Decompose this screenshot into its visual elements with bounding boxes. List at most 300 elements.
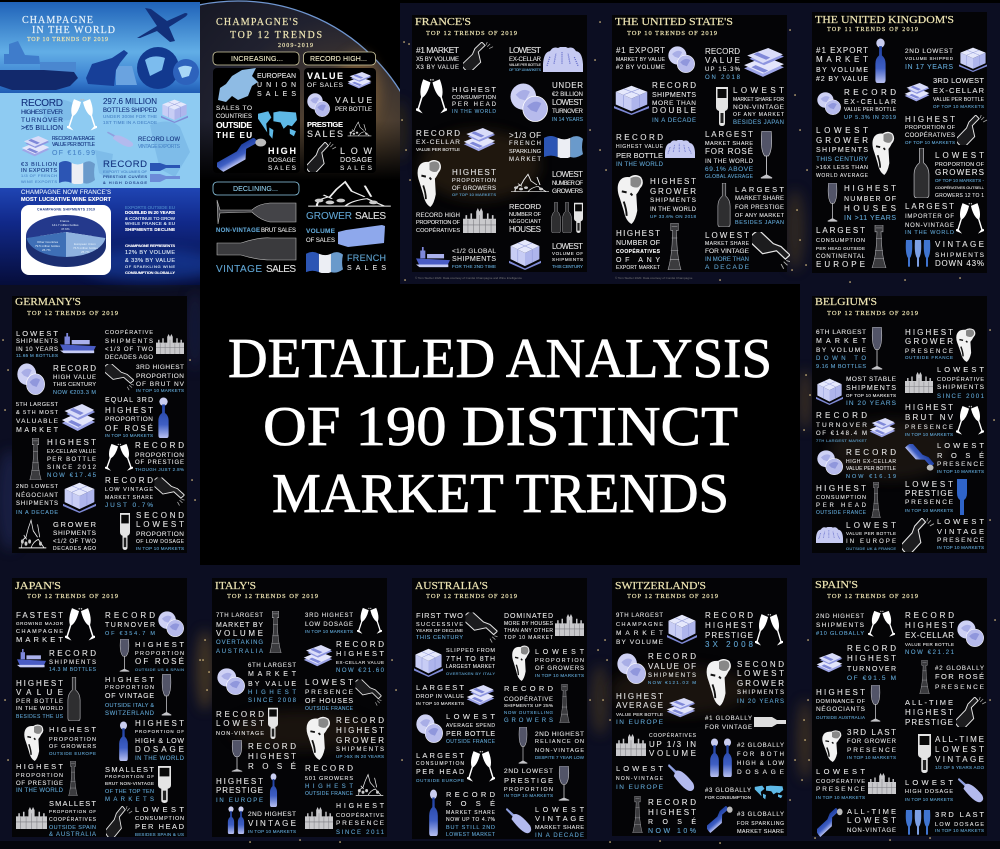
text: MARKETS [105,797,154,803]
text [16,611,64,644]
text: IN TOP 10 MARKETS [136,388,184,393]
heading: Switzerland [615,580,718,600]
icon: coins [668,46,695,73]
text: #3 GLOBALLY [705,788,751,794]
text: LOWEST [905,778,953,787]
text: IN EUROPE [616,784,664,791]
icon: grower bust [418,160,441,207]
text: PRESENCE [905,499,954,506]
text [705,47,741,81]
text: PRESENCE [905,349,953,355]
icon: bottle neck [918,734,931,773]
text [816,688,866,720]
text: HIGHEST VALUE [616,144,664,150]
text: record export volumes: RECORD [103,159,147,170]
heading: United States: THE UNITED STATE'S [615,16,733,28]
text: OF TOP 10 MARKETS [846,393,896,398]
text [937,365,985,400]
text: IN THE WORLD [616,162,664,168]
icon: bottle neck [716,87,728,126]
icon: bottle neck [120,513,130,550]
text: OUTSIDE US & SPAIN [135,667,184,672]
text: OUTSIDE FRANCE [305,791,354,797]
text: >16X LESS THAN [816,165,868,171]
credit: © Tom Stelzer 2020. Data courtesy of Comité Champagne [615,276,693,280]
icon: rosé flute [120,639,129,671]
text: MARKET SHARE [737,829,784,835]
text [650,177,697,219]
text: OF BRUT NV [136,381,185,388]
icon: truck [338,225,385,247]
text: EX-CELLAR [416,139,460,146]
text: IN 10 YEARS [16,347,58,353]
text [504,613,554,641]
text: IN EUROPE [216,798,263,804]
text [416,45,459,71]
text [552,242,583,269]
text: HIGHEST [248,752,296,761]
text [535,807,585,839]
text [844,88,897,121]
text: LOWEST [905,480,953,489]
icon: tower [872,225,886,268]
text: OUTSIDE UK & FRANCE [846,546,896,551]
heading: Germany: TOP 12 TRENDS OF 2019 [27,310,118,317]
text [416,683,464,706]
text: TOP 10 MARKET [504,635,553,641]
text: SHIPMENTS [452,256,496,263]
text: PROPORTION [105,685,154,691]
text: LOWEST [846,521,896,530]
text: share of sparkling wine: CHAMPAGNE REPRESENTS [125,243,175,248]
text: RECORD [248,742,296,751]
text: SHIPMENTS UP 25% [504,703,553,708]
text: HIGHEST [816,484,866,493]
text: OF €354.7 M [105,631,155,637]
text: CONTINENTAL [816,254,866,260]
text [446,648,495,676]
text: grower sales: GROWER [306,211,352,222]
icon: coins [510,83,548,122]
text: PROPORTION [135,651,184,657]
text: COOPÉRATIVES [616,247,661,255]
text: IN MORE THAN [705,257,749,263]
text: 9.16 M BOTTLES [816,364,866,370]
text [847,728,897,760]
text: HIGHEST [847,654,896,663]
text: SHIPMENTS [53,530,97,537]
text [705,611,754,649]
text: MOST STABLE [846,376,897,383]
text: 7TH LARGEST MARKET [816,438,868,443]
text [816,614,865,637]
text: PRESTIGE [905,718,953,727]
text: ALL-TIME [905,698,953,707]
icon: tower [668,223,681,270]
text: RECORD [305,764,353,773]
text: 11.65 M BOTTLES [16,353,58,358]
text [216,613,263,655]
text: THAN ANY OTHER [504,628,553,634]
text: LOWEST [16,329,58,338]
text: RECORD [105,611,155,620]
label: France: France [60,219,70,223]
text [905,328,953,360]
heading: Champagne in the World: IN THE WORLD [32,25,115,36]
text: PER HEAD [416,769,464,776]
icon: flute [828,183,837,221]
text: COOPÉRATIVE [336,812,384,819]
text [452,85,497,115]
icon: blue bottle [704,806,733,833]
text: record average value: RECORD AVERAGE [52,136,96,142]
text: OUTSIDE AUSTRALIA [816,715,865,720]
text: OUTSIDE EUROPE [416,778,464,783]
text: FOR CONSUMPTION [705,795,751,800]
text: record average value: OF €16.99 [52,150,95,157]
text: LOWEST [937,365,984,374]
icon: blue flute [668,764,694,791]
icon: ship [17,649,46,667]
text: HIGHEST [705,621,753,630]
text [49,649,97,673]
text: HIGHEST [305,784,353,790]
icon: flag [544,136,583,158]
icon: castle [905,372,933,393]
text: DOMINANCE OF [816,699,866,705]
text: PROPORTION [49,737,96,743]
icon: flute [519,727,527,763]
text [705,788,751,800]
text: OF PRESTIGE [135,460,184,466]
text: HIGHEST [905,115,955,124]
text: RECORD [446,790,496,799]
icon: blue bottles [906,240,930,267]
text: IN THE WORLD [16,706,63,712]
text: VOLUME SHIPPED [905,56,954,61]
text: OF TOP 10 MARKETS [933,104,984,109]
text: OF ANY MARKET [733,112,784,118]
text: 14.3 M BOTTLES [49,667,97,673]
text: VALUE PER BOTTLE [509,63,542,67]
text: DOUBLE [652,106,696,115]
text: BRUT NV [905,413,954,422]
text: HIGHEST [905,708,953,717]
icon: bust [872,132,894,175]
text: OF HOUSES [305,698,353,705]
text: HIGHEST [616,692,663,701]
text [105,675,155,717]
text [935,666,985,691]
text: OUTSIDE FRANCE [905,355,953,360]
text [616,46,666,71]
icon: bottle on its side [217,238,296,260]
text: NÉGOCIANTS [816,704,866,713]
text: MARKET [616,630,663,637]
text: BRUT NON-VINTAGE [105,781,154,786]
heading: Champagne's Top 12 Trends: TOP 12 TRENDS [230,30,322,41]
text: exports outside EU: DOUBLED IN 20 YEARS [125,210,175,215]
text: PRESENCE [905,425,953,431]
text: HIGHEST [135,640,184,649]
text: NOW €21.60 [336,668,385,674]
text [552,170,584,195]
text: OF €148.4 M [816,431,867,437]
text: 3RD HIGHEST [136,364,184,371]
icon: grower [19,520,46,548]
text: ALL-TIME [935,735,984,744]
text: 3X 2008 [705,640,754,649]
icon: bottle outline [303,142,336,176]
text: LOWEST [509,45,541,55]
text: prestige sales: SALES [307,129,343,139]
credit: © Tom Stelzer 2020. Data courtesy of Comité Champagne and Wine Intelligence [415,276,522,280]
icon: crate [667,615,697,644]
icon: cash [464,128,495,151]
text [937,517,985,550]
text: DECADES AGO [53,546,96,552]
label: European Union: 76.5 million bottles [73,246,98,250]
text: share of sparkling wine: CONSUMPTION GLOBALLY [125,270,175,275]
text: #1 EXPORT [616,46,665,55]
icon: castle [156,334,184,354]
icon: coins [617,653,646,684]
chart: champagne shipments pie [21,205,111,275]
text: VALUE PER BOTTLE [905,642,954,647]
label: increasing [213,52,299,65]
text: HOUSES [509,225,541,234]
text: MARKET SHARE [705,141,753,147]
icon: container ship [0,41,78,90]
text: ON 2018 [705,75,741,81]
text [16,762,64,794]
text: LOWEST [816,767,865,776]
text: RECORD [847,644,896,653]
text: NOW €203.3 M [53,390,96,396]
text: NUMBER OF [509,212,542,218]
text: RECORD [105,476,153,485]
text: HIGHEST [49,725,96,734]
text: 3 billion exports: WINE EXPORTS [21,179,57,184]
text [509,131,541,163]
text: IN 20 YEARS [737,699,784,705]
text: NOW OUTSELLING [504,710,553,715]
icon: coins [17,363,45,395]
text: GROWER [905,337,953,346]
icon: blue bottle [158,397,169,438]
icon: toast [354,607,385,634]
icon: grower [356,775,383,795]
icon: growers outline [308,182,391,206]
text [446,790,496,838]
text: SHIPMENTS [650,197,697,204]
text: AVERAGE SPEND [446,723,495,729]
text: IN THE WORLD [650,207,697,213]
text [135,719,185,762]
text: RECORD [616,133,663,142]
heading: Spain: SPAIN'S [815,579,858,591]
text: VALUE PER BOTTLE [846,466,897,472]
text [616,229,661,271]
text [844,184,896,222]
text: EX-CELLAR [844,99,896,106]
text: PRESTIGE [705,631,753,640]
text: SINCE 2011 [336,830,385,836]
text: HIGHEST [616,229,660,238]
label: record high: RECORD HIGH... [310,56,367,63]
text: OVERTAKING [216,640,263,646]
text: record export volumes: EXPORT VOLUMES OF [103,169,148,174]
text: LOWEST [733,86,784,95]
icon: coins [217,668,245,695]
text [735,185,785,226]
text: WORLD AVERAGE [816,173,869,179]
text: IN THE WORLD [905,230,954,236]
text [648,652,696,685]
text: OUTSIDE FRANCE [305,706,354,712]
icon: growers [511,174,549,192]
text: #3 GLOBALLY [737,812,784,818]
text: IN TOP 10 MARKETS [905,432,953,437]
text: VINTAGE [248,819,296,828]
text [535,649,585,678]
text: EX-CELLAR [905,631,954,640]
text: record low vintage: VINTAGE EXPORTS [138,144,181,150]
text: FOR ROSÉ [935,672,984,681]
text: SHIPMENTS [552,257,583,262]
text: ROSÉ [446,799,495,808]
label: Other Countries [35,240,60,252]
text: LOWEST [535,649,585,656]
icon: cash [467,685,494,705]
text: NUMBER OF [616,240,660,247]
icon: bottle [747,227,790,269]
heading: Switzerland: TOP 12 TRENDS OF 2019 [627,593,718,600]
text: RECORD [336,640,384,649]
icon: crate [614,86,649,115]
text: PROPORTION OF [905,125,956,131]
icon: bust [707,659,731,706]
heading: Japan: TOP 12 TRENDS OF 2019 [27,593,118,600]
icon: castle [16,807,47,829]
text: SECOND [136,511,184,520]
text [305,613,353,634]
text: <1/2 OF TWO [53,539,96,545]
icon: bottle [103,806,132,841]
icon: coins [307,93,330,117]
icon: banknote fan [816,527,843,543]
text: RECORD [652,81,696,90]
text: LARGEST [905,202,954,211]
text [847,807,896,834]
icon: coins [416,714,443,743]
text: OF TOP 10 MARKETS - [935,178,984,183]
text: share of sparkling wine: OF SPARKLING WINE [125,264,175,269]
text: LOW DOSAGE [305,622,353,628]
main heading: MARKET TRENDS [272,463,729,525]
text: VALUE PER BOTTLE [846,531,896,536]
text [737,660,784,705]
text: low dosage sales: LOW [340,146,372,156]
icon: grapes outline [348,122,371,136]
icon: castle [868,773,896,794]
text: PRESENCE [847,747,897,754]
text: VALUE [16,688,63,697]
icon: blue bottle [875,39,886,83]
text: HOUSES [844,204,896,213]
text: HIGHEST [47,438,96,447]
text: 9TH LARGEST [616,613,663,619]
panel: United States [612,15,790,280]
text [446,712,496,745]
text: LOWEST [935,745,984,754]
text: SMALLEST [49,799,96,808]
text: AUSTRALIA [216,649,263,655]
icon: tower [30,438,41,480]
text [816,126,869,179]
icon: bust [822,730,841,762]
text: European Union sales: EUROPEAN [257,73,296,80]
text: SLIPPED FROM [446,648,495,654]
text: IN EUROPE [846,539,896,545]
text: sales outside the EU: THE EU [216,131,252,140]
text: volume of sales: VOLUME [306,228,336,235]
text: IN TOP 10 MARKETS [816,795,865,800]
icon: bottle [459,42,493,73]
text: PER HEAD [452,102,497,108]
text: value per bottle [335,95,372,113]
text: PER BOTTLE [616,151,663,160]
text [135,640,184,672]
text: ROSÉ [937,451,984,460]
icon: blue bottle [905,441,934,471]
text: JUST 0.7% [105,502,153,509]
text: HIGHEST [16,762,63,771]
icon: bottle [101,361,134,390]
text: #2 GLOBALLY [935,666,984,672]
text: HIGHEST [905,621,954,630]
text: 3RD LAST [847,728,896,737]
text: LOWEST [552,98,583,107]
text: PROPORTION OF [49,809,96,814]
text: 2ND HIGHEST [535,731,584,738]
text: LOWEST [535,807,585,814]
text: SHIPMENTS [652,92,696,99]
text: exports outside EU: EXPORTS OUTSIDE EU [125,205,175,210]
text: PROPORTION OF [416,220,461,226]
icon: bottle [151,474,184,506]
text: UP 1/3 IN [649,740,696,749]
text: #2 BY VOLUME [616,65,665,71]
text: YEARS OF DECLINE [416,628,463,633]
icon: castle [305,807,333,829]
text: value of sales [307,71,344,89]
text: #1 GLOBALLY [705,716,752,722]
label: France: 141.7 million bottles [52,223,79,227]
text: VALUE PER BOTTLE [844,107,897,113]
text: sales outside the EU: OUTSIDE [216,120,252,130]
icon: truck and crane [86,50,137,86]
text: UNDER [552,81,583,90]
text [105,476,154,509]
text: IN TOP 10 MARKETS [937,469,984,474]
text: HIGHEST [650,177,696,186]
text [705,130,754,180]
text: SHIPMENTS [737,690,784,696]
text: volume of sales: OF SALES [306,238,335,244]
heading: Spain: TOP 12 TRENDS OF 2019 [827,593,918,600]
icon: toast [953,405,987,435]
